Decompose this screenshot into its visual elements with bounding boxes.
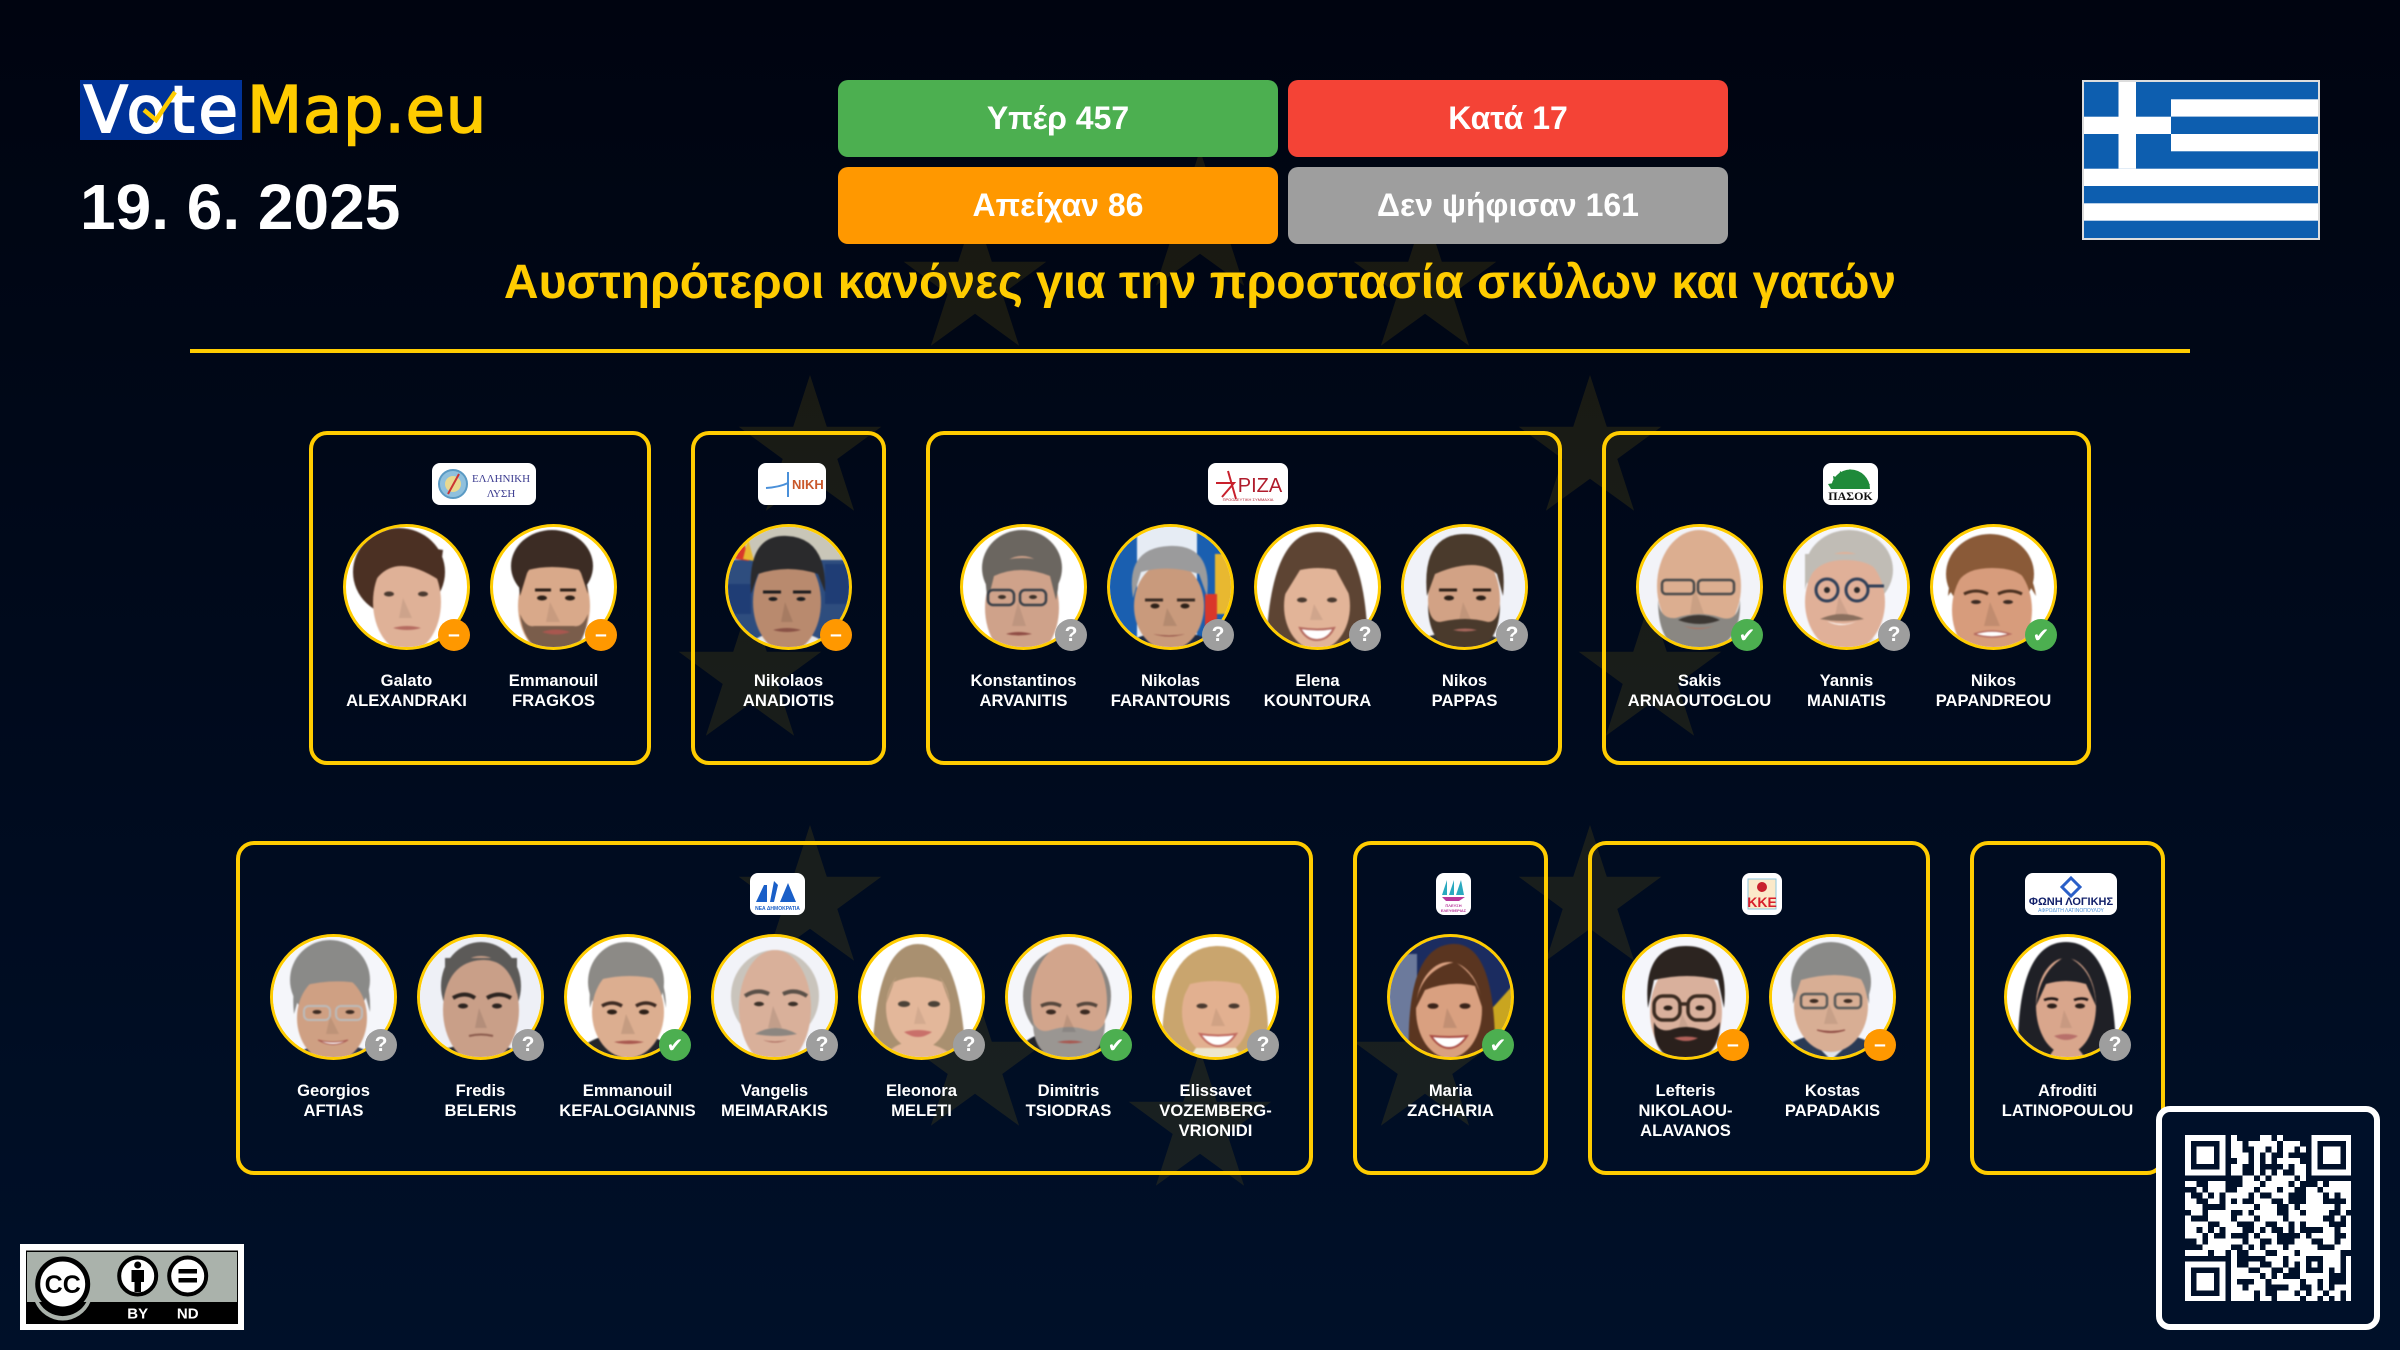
party logo: Foni Logikis: ΦΩΝΗ ΛΟΓΙΚΗΣ	[2029, 896, 2113, 908]
member: Nikolaos Anadiotis	[725, 524, 852, 710]
name: KEFALOGIANNIS	[559, 1101, 696, 1120]
vote badge: for	[1731, 619, 1763, 651]
member: Eleonora Meleti	[858, 934, 985, 1120]
name: PAPPAS	[1432, 691, 1497, 710]
photo	[1387, 934, 1514, 1060]
name: Maria	[1429, 1081, 1472, 1100]
party logo: Plefsi Eleftherias: ΠΛΕΥΣΗ	[1445, 903, 1462, 908]
party logo: Syriza: ΡΙΖΑ	[1238, 475, 1283, 497]
photo	[960, 524, 1087, 650]
name: Kostas	[1805, 1081, 1860, 1100]
member: Lefteris Nikolaou-Alavanos	[1622, 934, 1749, 1140]
name: Galato	[381, 671, 432, 690]
vote badge: no vote	[806, 1029, 838, 1061]
party logo: Niki: ΝΙΚΗ	[792, 477, 824, 492]
party logo: Niki	[758, 463, 826, 505]
vote badge: abstain	[820, 619, 852, 651]
vote badge: no vote: ?	[1065, 623, 1077, 646]
panel: Niki	[691, 431, 886, 765]
vote badge: for: ✔	[1490, 1033, 1506, 1057]
vote badge: no vote: ?	[1212, 623, 1224, 646]
vote badge: no vote	[1878, 619, 1910, 651]
member: Emmanouil Kefalogiannis	[559, 934, 696, 1120]
vote badge: no vote: ?	[1888, 623, 1900, 646]
party logo: Elliniki Lysi: ΕΛΛΗΝΙΚΗ	[472, 473, 530, 485]
vote badge: for: ✔	[1108, 1033, 1124, 1057]
name: Eleonora	[886, 1081, 957, 1100]
member: Kostas Papadakis	[1769, 934, 1896, 1164]
name: MELETI	[891, 1101, 952, 1120]
vote count: for: Υπέρ 457	[987, 100, 1129, 136]
member: Fredis Beleris	[417, 934, 544, 1120]
panel: Pasok	[1602, 431, 2091, 765]
vote badge: abstain: –	[448, 623, 460, 646]
party logo: Syriza: ΠΡΟΟΔΕΥΤΙΚΗ ΣΥΜΜΑΧΙΑ	[1223, 497, 1274, 502]
license badge: CC BY-ND: CC	[45, 1271, 81, 1299]
vote count: did not vote: Δεν ψήφισαν 161	[1377, 187, 1639, 223]
QR code	[2156, 1106, 2380, 1330]
vote badge: no vote: ?	[2109, 1033, 2121, 1056]
vote badge: abstain: –	[830, 623, 842, 646]
title: Αυστηρότεροι κανόνες για την προστασία σκύλων και γατών	[504, 256, 1896, 308]
logo: VoteMap.eu	[80, 74, 487, 148]
photo	[1930, 524, 2057, 650]
vote badge: no vote: ?	[1359, 623, 1371, 646]
name: Nikos	[1971, 671, 2016, 690]
party logo: Elliniki Lysi: ΛΥΣΗ	[487, 488, 515, 500]
name: FARANTOURIS	[1111, 691, 1230, 710]
vote badge: abstain	[438, 619, 470, 651]
name: VOZEMBERG-	[1159, 1101, 1272, 1120]
name	[721, 1081, 828, 1120]
name: MANIATIS	[1807, 691, 1886, 710]
member: Afroditi Latinopoulou	[2004, 934, 2131, 1164]
party logo: KKE: ΚΚΕ	[1747, 894, 1777, 910]
name	[1111, 671, 1230, 710]
vote badge: no vote: ?	[1506, 623, 1518, 646]
panel: Syriza	[926, 431, 1562, 765]
vote badge: for	[1482, 1029, 1514, 1061]
vote badge: abstain: –	[1874, 1033, 1886, 1056]
name	[1264, 671, 1371, 710]
photo	[1254, 524, 1381, 650]
member: Vangelis Meimarakis	[711, 934, 838, 1120]
photo	[417, 934, 544, 1060]
panel: Elliniki Lysi	[309, 431, 651, 765]
vote badge: no vote	[365, 1029, 397, 1061]
name	[346, 671, 467, 710]
member: Sakis Arnaoutoglou	[1628, 524, 1771, 710]
name: Emmanouil	[509, 671, 598, 690]
vote badge: abstain	[585, 619, 617, 651]
name: ARVANITIS	[980, 691, 1067, 710]
name: VRIONIDI	[1179, 1121, 1252, 1140]
name	[559, 1081, 696, 1120]
member: Maria Zacharia	[1387, 934, 1514, 1120]
party logo: Pasok	[1823, 463, 1878, 505]
photo	[1769, 934, 1896, 1060]
name: Nikos	[1442, 671, 1487, 690]
name: Dimitris	[1038, 1081, 1099, 1100]
vote badge: no vote: ?	[816, 1033, 828, 1056]
panel: Nea Dimokratia	[236, 841, 1313, 1175]
member: Elissavet Vozemberg-Vrionidi	[1152, 934, 1279, 1140]
name: ARNAOUTOGLOU	[1628, 691, 1771, 710]
name	[1407, 1081, 1494, 1120]
vote badge: for: ✔	[2033, 623, 2049, 647]
photo	[2004, 934, 2131, 1060]
vote badge: no vote	[1247, 1029, 1279, 1061]
vote badge: abstain: –	[1727, 1033, 1739, 1056]
vote badge: no vote	[953, 1029, 985, 1061]
vote count: for	[838, 80, 1278, 157]
vote count: did not vote	[1288, 167, 1728, 244]
vote badge: for	[2025, 619, 2057, 651]
license badge: CC BY-ND: ND	[177, 1306, 199, 1322]
name: PAPANDREOU	[1936, 691, 2051, 710]
party logo: Nea Dimokratia	[750, 873, 805, 915]
name: AFTIAS	[304, 1101, 363, 1120]
name: Lefteris	[1656, 1081, 1715, 1100]
vote badge: abstain: –	[595, 623, 607, 646]
name	[1638, 1081, 1733, 1140]
name: PAPADAKIS	[1785, 1101, 1880, 1120]
icon: Greek flag	[2082, 80, 2320, 240]
vote badge: no vote	[1349, 619, 1381, 651]
member: Nikos Papandreou	[1930, 524, 2057, 710]
name	[445, 1081, 516, 1120]
member: Elena Kountoura	[1254, 524, 1381, 710]
vote badge: no vote	[1496, 619, 1528, 651]
title rule	[190, 349, 2190, 353]
vote count: against	[1288, 80, 1728, 157]
name: TSIODRAS	[1026, 1101, 1111, 1120]
vote badge: abstain	[1717, 1029, 1749, 1061]
name: KOUNTOURA	[1264, 691, 1371, 710]
name	[1628, 671, 1771, 710]
photo	[711, 934, 838, 1060]
vote badge: for	[1100, 1029, 1132, 1061]
vote count: abstained: Απείχαν 86	[973, 187, 1143, 223]
name: ALEXANDRAKI	[346, 691, 467, 710]
name	[1984, 1081, 2151, 1121]
party logo: Elliniki Lysi	[432, 463, 536, 505]
name: NIKOLAOU-	[1638, 1101, 1733, 1120]
photo	[1152, 934, 1279, 1060]
photo	[1783, 524, 1910, 650]
name: Sakis	[1678, 671, 1721, 690]
vote badge: no vote: ?	[1257, 1033, 1269, 1056]
name: LATINOPOULOU	[2002, 1101, 2133, 1120]
vote badge: for	[659, 1029, 691, 1061]
name	[1936, 671, 2051, 710]
vote badge: no vote	[2099, 1029, 2131, 1061]
name: ANADIOTIS	[743, 691, 834, 710]
member: Nikolas Farantouris	[1107, 524, 1234, 710]
vote badge: no vote	[1202, 619, 1234, 651]
member: Yannis Maniatis	[1783, 524, 1910, 710]
name: Vangelis	[741, 1081, 808, 1100]
photo	[490, 524, 617, 650]
party logo: Foni Logikis: ΑΦΡΟΔΙΤΗ ΛΑΤΙΝΟΠΟΥΛΟΥ	[2038, 908, 2104, 914]
name	[886, 1081, 958, 1120]
license badge: CC BY-ND: BY	[127, 1306, 148, 1322]
party logo: Foni Logikis	[2025, 873, 2117, 915]
photo	[1401, 524, 1528, 650]
name: Konstantinos	[970, 671, 1076, 690]
member: Galato Alexandraki	[343, 524, 470, 710]
vote badge: for: ✔	[1739, 623, 1755, 647]
photo	[270, 934, 397, 1060]
name: FRAGKOS	[512, 691, 595, 710]
name: Afroditi	[2038, 1081, 2097, 1100]
vote badge: for: ✔	[667, 1033, 683, 1057]
name	[509, 671, 598, 710]
member: Konstantinos Arvanitis	[960, 524, 1087, 710]
name: Yannis	[1820, 671, 1873, 690]
member: Dimitris Tsiodras	[1005, 934, 1132, 1120]
member: Emmanouil Fragkos	[490, 524, 617, 710]
vote badge: no vote: ?	[375, 1033, 387, 1056]
panel: KKE	[1588, 841, 1930, 1175]
photo	[343, 524, 470, 650]
name	[1159, 1081, 1272, 1140]
photo	[564, 934, 691, 1060]
name: Nikolaos	[754, 671, 823, 690]
name: Georgios	[297, 1081, 370, 1100]
name	[1026, 1081, 1111, 1120]
party logo: Plefsi Eleftherias	[1436, 873, 1471, 915]
name: MEIMARAKIS	[721, 1101, 828, 1120]
party logo: Pasok: ΠΑΣΟΚ	[1828, 489, 1873, 503]
date: 19. 6. 2025	[80, 171, 400, 243]
name: Emmanouil	[583, 1081, 672, 1100]
license badge: CC BY-ND	[20, 1244, 244, 1330]
photo	[858, 934, 985, 1060]
party logo: Syriza	[1208, 463, 1288, 505]
party logo: KKE	[1742, 873, 1782, 915]
name: ZACHARIA	[1407, 1101, 1494, 1120]
name: ALAVANOS	[1640, 1121, 1731, 1140]
name	[1807, 671, 1886, 710]
vote count: against: Κατά 17	[1448, 100, 1568, 136]
name: BELERIS	[445, 1101, 516, 1120]
member: Georgios Aftias	[270, 934, 397, 1120]
photo	[725, 524, 852, 650]
vote badge: no vote: ?	[522, 1033, 534, 1056]
party logo: Nea Dimokratia: ΝΕΑ ΔΗΜΟΚΡΑΤΙΑ	[755, 906, 800, 912]
party logo: Plefsi Eleftherias: ΕΛΕΥΘΕΡΙΑΣ	[1441, 908, 1467, 913]
logo text: Map.eu: Map.eu	[247, 74, 487, 148]
name: Fredis	[456, 1081, 505, 1100]
name	[297, 1081, 370, 1120]
vote count: abstained	[838, 167, 1278, 244]
name: Nikolas	[1141, 671, 1200, 690]
photo	[1636, 524, 1763, 650]
name	[1749, 1081, 1916, 1121]
panel: Foni Logikis	[1970, 841, 2165, 1175]
name	[1432, 671, 1497, 710]
name: Elena	[1295, 671, 1340, 690]
photo	[1622, 934, 1749, 1060]
name: Elissavet	[1180, 1081, 1251, 1100]
name	[743, 671, 834, 710]
name	[970, 671, 1076, 710]
photo	[1107, 524, 1234, 650]
member: Nikos Pappas	[1401, 524, 1528, 710]
vote badge: no vote	[512, 1029, 544, 1061]
vote badge: no vote: ?	[963, 1033, 975, 1056]
photo	[1005, 934, 1132, 1060]
vote badge: abstain	[1864, 1029, 1896, 1061]
vote badge: no vote	[1055, 619, 1087, 651]
panel: Plefsi Eleftherias	[1353, 841, 1548, 1175]
